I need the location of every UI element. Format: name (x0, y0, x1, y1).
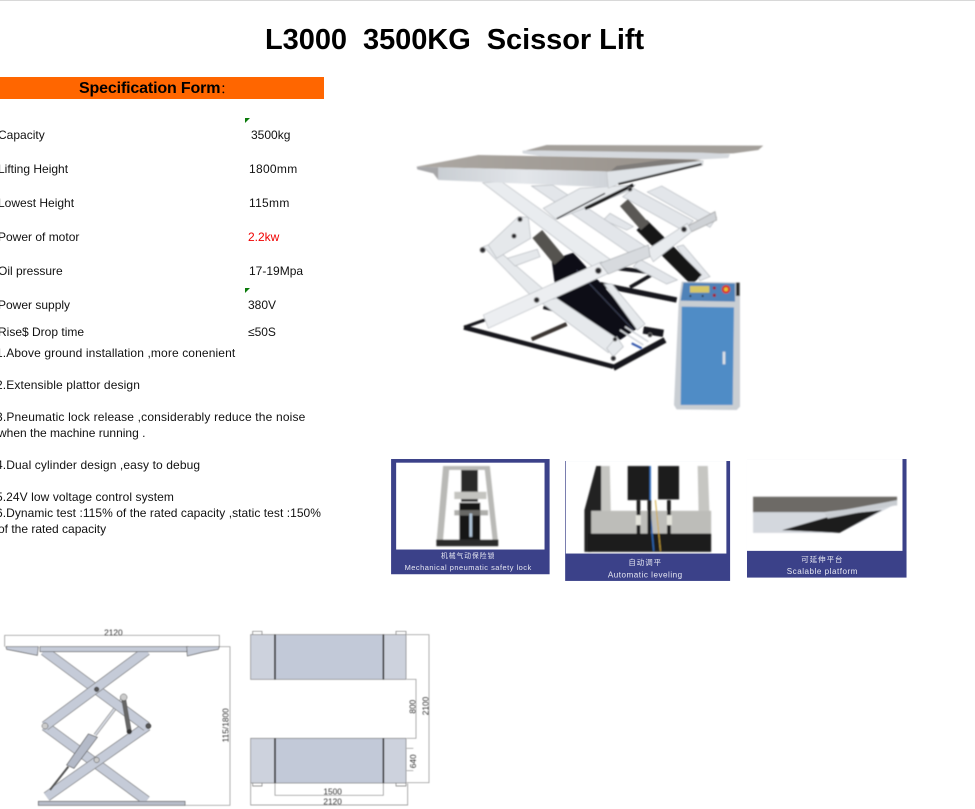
feature list: of the rated capacity (0, 522, 106, 536)
long lower arm (483, 262, 608, 328)
section header: specification form (0, 77, 324, 99)
row: rise and drop time: Rise$ Drop time (0, 325, 84, 339)
row: power supply: 380V (248, 298, 276, 312)
front cylinder (552, 253, 640, 340)
platform photo (753, 497, 897, 533)
photo panel: automatic leveling (565, 461, 730, 581)
caption: 可延伸平台 (801, 555, 843, 564)
row: rise and drop time (0, 325, 276, 339)
feature list (0, 346, 321, 536)
dimension labels: 2120 (323, 797, 342, 807)
feature list: 4.Dual cylinder design ,easy to debug (0, 458, 200, 472)
rear long arm (647, 223, 692, 262)
plan view dimension drawing (251, 631, 431, 807)
long front arm (483, 182, 613, 272)
dimension labels (323, 696, 431, 807)
row: lifting height (0, 162, 298, 176)
row: power of motor: Power of motor (0, 230, 79, 244)
row: oil pressure (0, 264, 304, 278)
rear cylinder (642, 225, 697, 280)
front platform (417, 155, 702, 172)
feature list: when the machine running . (0, 426, 145, 440)
rear platform (522, 145, 763, 154)
base plate (38, 801, 185, 805)
control cabinet (674, 282, 740, 410)
marker: power supply cell (245, 288, 250, 293)
row: power supply (0, 298, 276, 312)
scissor arms (44, 651, 147, 801)
dimension labels: 1500 (323, 787, 342, 797)
photo panel: automatic leveling: Automatic leveling (608, 571, 683, 580)
photo panel: scalable platform (747, 459, 907, 578)
product photo: scissor lift with control cabinet (417, 145, 763, 410)
caption: 自动调平 (628, 558, 662, 567)
second front arm (532, 185, 648, 259)
marker: capacity cell (245, 118, 250, 123)
rear scissor arms (603, 186, 717, 284)
left upper bracket arms (488, 217, 540, 266)
dimension labels: 2120 (104, 628, 123, 638)
dimension labels: 640 (408, 754, 418, 768)
photo panel: mechanical pneumatic safety lock (391, 459, 550, 574)
upper platform (251, 631, 406, 679)
row: power of motor (0, 230, 280, 244)
row: power supply: Power supply (0, 298, 70, 312)
pivot bolts (480, 187, 687, 361)
photo panel: scalable platform: Scalable platform (787, 567, 858, 576)
feature list: 6.Dynamic test :115% of the rated capacity ,static test :150% (0, 506, 321, 520)
cross bar upper (543, 185, 635, 219)
lower platform (251, 738, 406, 786)
row: lowest height: 115mm (249, 196, 290, 210)
row: capacity: 3500kg (251, 128, 290, 142)
row: lowest height: Lowest Height (0, 196, 74, 210)
dimension labels: 800 (407, 699, 417, 714)
caption: 机械气动保险锁 (441, 551, 495, 560)
top platform (40, 647, 188, 652)
section header: specification form: Specification Form： (79, 80, 232, 97)
row: power of motor: 2.2kw (248, 230, 279, 244)
title: L3000 3500KG Scissor Lift (265, 24, 644, 56)
feature list: 3.Pneumatic lock release ,considerably reduce the noise (0, 410, 306, 424)
row: lifting height: Lifting Height (0, 162, 68, 176)
row: lifting height: 1800mm (249, 162, 298, 176)
lower arm plates (483, 244, 645, 357)
row: rise and drop time: ≤50S (248, 325, 276, 339)
cylinder rod (95, 698, 123, 735)
photo panel: mechanical pneumatic safety lock: Mechanical pneumatic safety lock (405, 563, 532, 572)
dimension lines (251, 635, 429, 805)
cylinders photo (584, 466, 711, 552)
feature list: 2.Extensible plattor design (0, 378, 140, 392)
row: lowest height (0, 196, 290, 210)
row: oil pressure: 17-19Mpa (249, 264, 303, 278)
feature list: 5.24V low voltage control system (0, 490, 174, 504)
dimension labels: 2100 (421, 696, 431, 715)
row: capacity (0, 128, 290, 142)
side elevation dimension drawing: 115/1800 (221, 708, 231, 742)
side elevation dimension drawing (5, 628, 231, 805)
feature list: 1.Above ground installation ,more conenient (0, 346, 235, 360)
lever (123, 697, 129, 732)
rear end brackets (687, 212, 717, 232)
hoses (620, 327, 648, 345)
specification table (0, 118, 304, 339)
pivots (42, 687, 151, 763)
dimension lines (5, 635, 230, 805)
lock mechanism photo (436, 466, 498, 546)
cylinder body (50, 734, 97, 790)
lift base frame (464, 267, 677, 368)
